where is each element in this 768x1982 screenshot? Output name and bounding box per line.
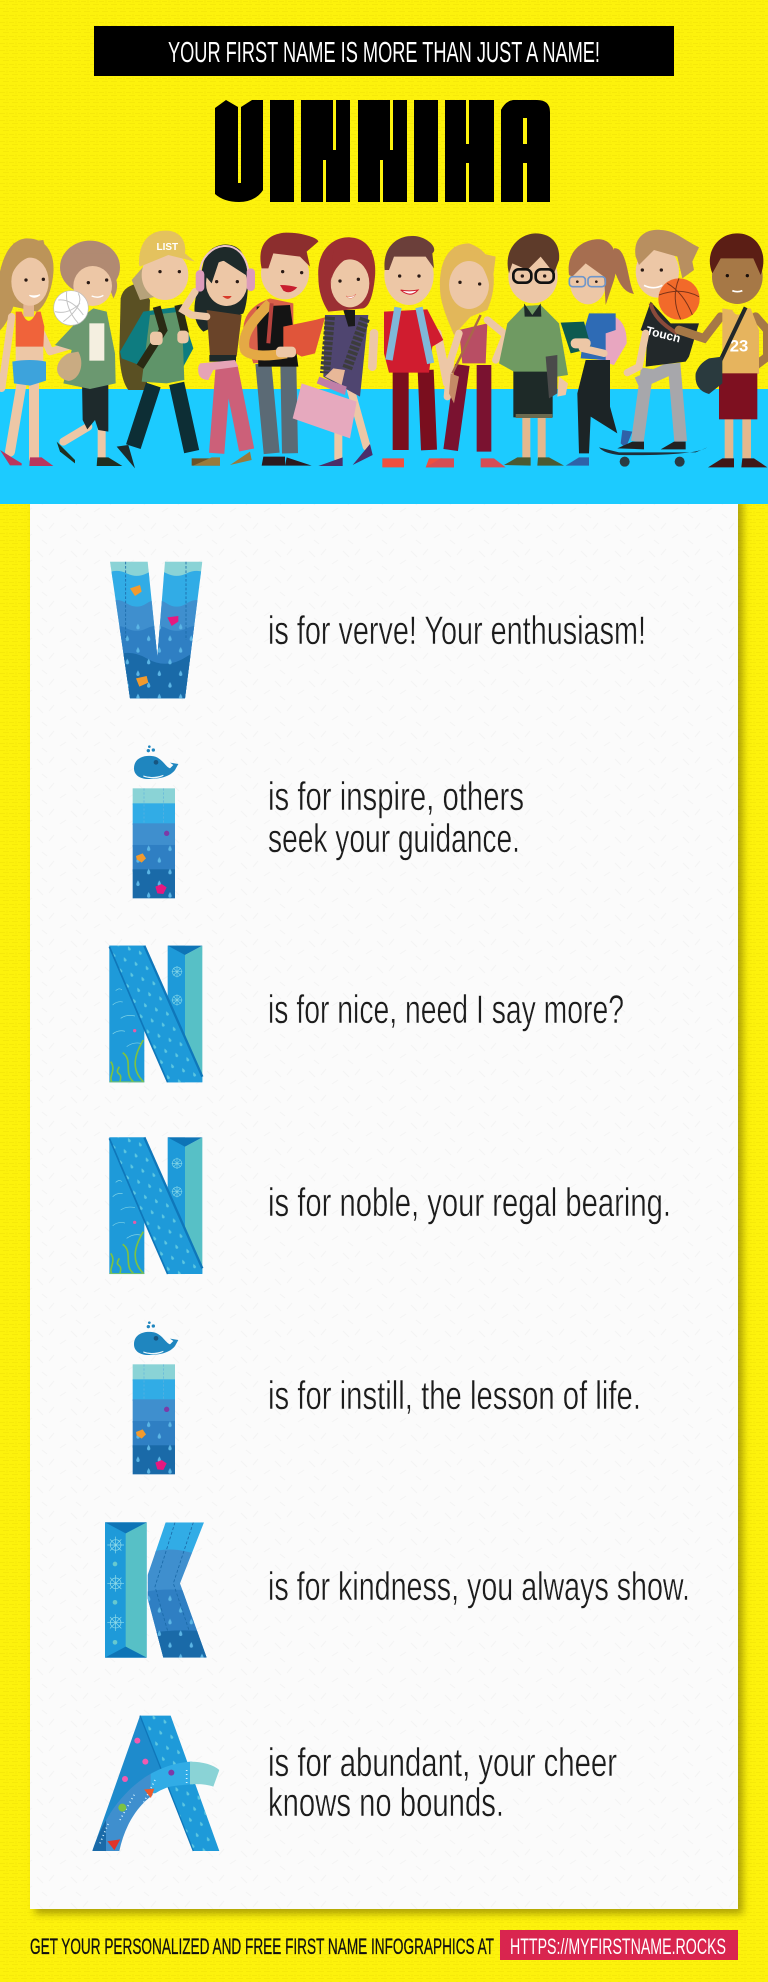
name title [215,100,550,202]
person 8: blonde girl [426,243,506,467]
name title: I [275,88,289,210]
person 12: curly-haired boy with tank top: 23 [730,337,748,356]
people group, right side [372,230,767,467]
letter A [90,1716,223,1853]
text: N line: is for nice, need I say more? [268,988,624,1032]
name title: N [307,88,343,210]
person 3: hiker with backpack and cap: LIST [157,242,178,253]
letter I with whale [133,745,178,898]
name title: N [364,88,400,210]
person 7: boy in red shirt [372,236,454,467]
person 3: hiker with backpack and cap [117,231,220,468]
name title: I [419,88,433,210]
person 2: girl with volleyball [54,241,122,466]
name title: K [451,88,487,210]
person 12: curly-haired boy with tank top [679,233,767,467]
person 11: skateboarder with basketball [599,230,707,467]
title letter counters [323,100,527,202]
blue floor band [0,389,768,504]
person 10: girl with ponytail and tablet [561,239,634,466]
letter N [109,946,202,1082]
text: A line [268,1741,617,1825]
footer call to action: GET YOUR PERSONALIZED AND FREE FIRST NAME INFOGRAPHICS AT [30,1934,494,1959]
person 5: boy with red book [243,233,325,466]
name title: V [222,88,256,210]
header banner [94,26,674,76]
second letter N [109,1137,202,1274]
white content panel shadow [35,500,743,1914]
white content panel [30,504,738,1909]
text: I line: is for inspire, others [268,775,524,819]
text: A line: knows no bounds. [268,1781,504,1825]
letter K [105,1520,210,1660]
people group, left side [0,231,375,468]
text: second I line: is for instill, the lesson of life. [268,1374,641,1418]
person 11: skateboarder with basketball: Touch [645,323,682,345]
person 4: girl with headphones [183,245,255,466]
person 6: girl with red bob and pink bag [293,237,375,466]
person 1: girl in orange top [0,238,78,466]
text: I line: seek your guidance. [268,817,520,861]
text: I line [268,775,524,861]
name title: A [507,88,543,210]
second letter I with whale [133,1321,178,1474]
letter V [107,560,207,700]
text: A line: is for abundant, your cheer [268,1741,617,1785]
person 9: boy with glasses and green sweater [499,233,568,466]
